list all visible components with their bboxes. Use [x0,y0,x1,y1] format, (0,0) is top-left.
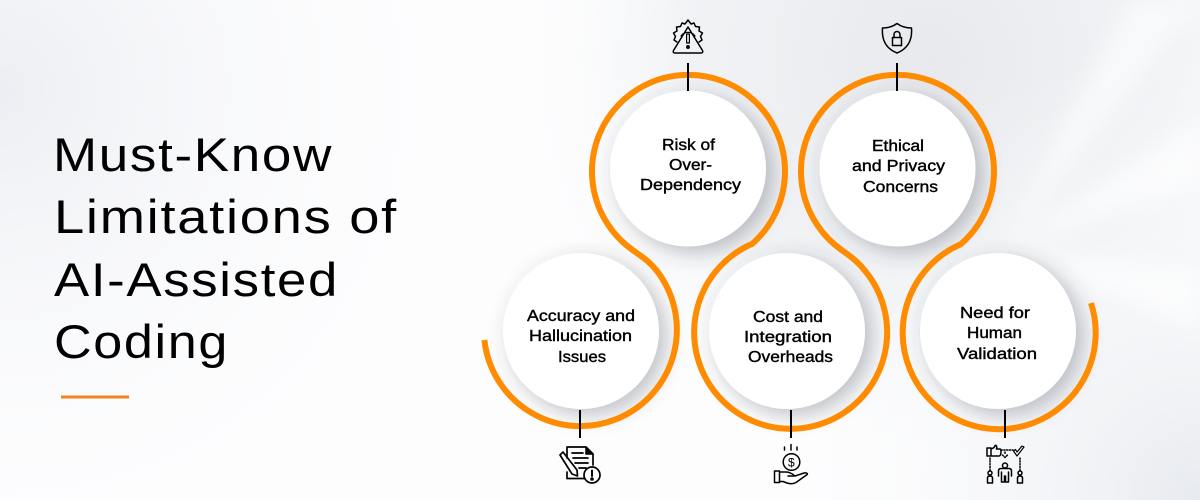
orange continuous ring [484,75,1096,429]
label: Cost and Integration Overheads: Overheads [748,349,833,366]
title underline [61,396,129,398]
label: Accuracy and Hallucination Issues: Hallucination [529,328,632,345]
label: Ethical and Privacy Concerns: Ethical [872,138,924,155]
label: Accuracy and Hallucination Issues: Accuracy and [527,308,635,325]
label: Cost and Integration Overheads: Integration [744,329,832,346]
label: Accuracy and Hallucination Issues [527,308,635,366]
label: Risk of Over-Dependency [640,137,741,194]
icon: hand holding dollar coin [774,444,807,484]
label: Ethical and Privacy Concerns: and Privacy [852,158,945,175]
label: Risk of Over-Dependency: Risk of [662,137,716,154]
title: Coding [54,316,229,369]
icon: hand holding dollar coin: $ [788,456,795,470]
label: Need for Human Validation: Need for [960,305,1031,322]
title [53,129,398,369]
label: Ethical and Privacy Concerns [852,138,945,196]
icon: document with pencil and alert [560,447,600,483]
label: Ethical and Privacy Concerns: Concerns [863,179,938,196]
label: Need for Human Validation [957,305,1037,363]
white circles [503,90,1076,409]
icon: gear warning triangle [673,20,703,53]
connector lines [580,63,1005,438]
title: AI-Assisted [54,254,339,307]
label: Cost and Integration Overheads: Cost and [753,309,823,326]
label: Risk of Over-Dependency: Over- [669,157,712,174]
title: Must-Know [53,129,333,182]
label: Cost and Integration Overheads [744,309,833,366]
label: Need for Human Validation: Validation [957,346,1037,363]
label: Risk of Over-Dependency: Dependency [640,177,741,194]
label: Need for Human Validation: Human [967,325,1022,342]
label: Accuracy and Hallucination Issues: Issues [558,349,606,366]
icon: people with thumbs-up and check [987,445,1024,483]
title: Limitations of [54,191,398,244]
icon: shield with lock [882,24,912,53]
